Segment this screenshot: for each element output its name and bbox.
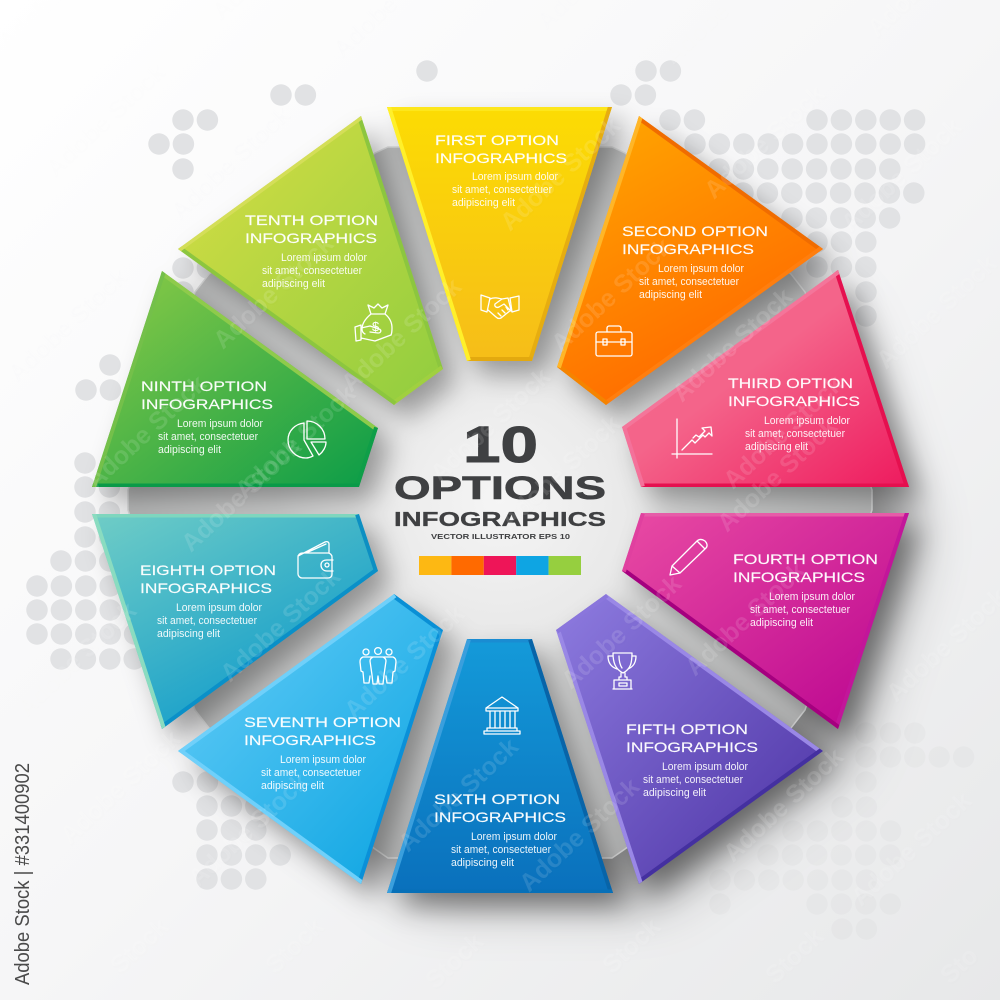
body text bbox=[157, 602, 262, 640]
stock watermarks: Adobe Stock bbox=[514, 773, 645, 897]
stock watermarks: Adobe Stock bbox=[680, 557, 811, 681]
subtitle: VECTOR ILLUSTRATOR EPS 10 bbox=[431, 532, 570, 541]
panel shadows bbox=[105, 121, 922, 907]
heading: FIRST OPTION bbox=[435, 132, 559, 148]
stock watermarks: Adobe Stock bbox=[176, 433, 307, 557]
stock watermarks: Adobe Stock bbox=[81, 370, 212, 494]
body text: Lorem ipsum dolor bbox=[281, 252, 367, 264]
body text: adipiscing elit bbox=[452, 197, 515, 209]
body text bbox=[452, 171, 558, 209]
stock watermarks: Stock bbox=[105, 912, 174, 979]
segment shape bbox=[92, 514, 378, 729]
icon: pen bbox=[670, 540, 707, 575]
stock watermarks: Adobe Stock bbox=[39, 57, 170, 181]
body text: adipiscing elit bbox=[262, 278, 325, 290]
stock watermarks: Adobe Stock bbox=[712, 413, 843, 537]
body text: Lorem ipsum dolor bbox=[471, 831, 557, 843]
body text bbox=[261, 754, 366, 792]
title: infographics: INFOGRAPHICS bbox=[394, 509, 606, 531]
heading: FIFTH OPTION bbox=[626, 721, 748, 737]
segment shape bbox=[92, 271, 378, 487]
stock watermarks: Adobe Stock bbox=[836, 113, 967, 237]
icon: wallet bbox=[298, 542, 333, 578]
colour swatch bar bbox=[419, 556, 581, 575]
segment shape bbox=[178, 116, 443, 405]
panel: sixth option bbox=[387, 639, 613, 893]
body text: adipiscing elit bbox=[639, 289, 702, 301]
heading: INFOGRAPHICS bbox=[733, 569, 865, 585]
icon: briefcase bbox=[596, 326, 632, 356]
segment shape bbox=[178, 594, 443, 884]
heading: INFOGRAPHICS bbox=[622, 241, 754, 257]
panel: second option bbox=[557, 116, 823, 405]
body text: sit amet, consectetuer bbox=[157, 615, 257, 627]
icon: people bbox=[360, 648, 396, 684]
body text bbox=[451, 831, 557, 869]
heading: NINTH OPTION bbox=[141, 378, 267, 394]
stock watermarks: Adobe Stock bbox=[718, 743, 849, 867]
body text: sit amet, consectetuer bbox=[261, 767, 361, 779]
body text: adipiscing elit bbox=[643, 787, 706, 799]
stock watermarks: Adobe Stock bbox=[215, 563, 346, 687]
title: options: OPTIONS bbox=[394, 470, 606, 506]
stock watermarks: Sto bbox=[935, 941, 984, 989]
background dot map bbox=[37, 71, 964, 929]
body text bbox=[158, 418, 263, 456]
icon: handshake bbox=[481, 295, 519, 318]
stock watermarks: Adobe Stock bbox=[871, 250, 1000, 374]
title: 10: 10 bbox=[463, 416, 538, 473]
stock watermarks: Stock bbox=[420, 927, 489, 994]
icon: bank bbox=[484, 697, 520, 734]
body text: Lorem ipsum dolor bbox=[769, 591, 855, 603]
heading bbox=[728, 375, 860, 409]
body text: adipiscing elit bbox=[157, 628, 220, 640]
stock watermarks: Adobe Stock bbox=[336, 273, 467, 397]
stock watermarks: Stock bbox=[597, 912, 666, 979]
body text: sit amet, consectetuer bbox=[750, 604, 850, 616]
heading bbox=[435, 132, 567, 166]
body text bbox=[639, 263, 744, 301]
heading: SECOND OPTION bbox=[622, 223, 768, 239]
stock watermarks: Adobe Stock bbox=[183, 768, 314, 892]
stock watermarks: Adobe Stock bbox=[11, 597, 142, 721]
segment shape bbox=[387, 639, 613, 893]
stock watermarks: Adobe Stock bbox=[164, 100, 295, 224]
body text bbox=[643, 761, 748, 799]
body text: Lorem ipsum dolor bbox=[658, 263, 744, 275]
heading: SIXTH OPTION bbox=[434, 791, 560, 807]
body text: Lorem ipsum dolor bbox=[280, 754, 366, 766]
icon: pie chart bbox=[288, 421, 326, 458]
heading bbox=[244, 714, 401, 748]
heading: INFOGRAPHICS bbox=[244, 732, 376, 748]
body text bbox=[750, 591, 855, 629]
heading: INFOGRAPHICS bbox=[728, 393, 860, 409]
panel: fourth option bbox=[622, 513, 909, 729]
body text: sit amet, consectetuer bbox=[262, 265, 362, 277]
body text: adipiscing elit bbox=[745, 441, 808, 453]
panel: tenth option bbox=[178, 116, 443, 405]
body text: sit amet, consectetuer bbox=[643, 774, 743, 786]
stock watermarks: Adobe Stock bbox=[718, 370, 849, 494]
segment shape bbox=[622, 270, 909, 487]
heading: INFOGRAPHICS bbox=[626, 739, 758, 755]
body text: adipiscing elit bbox=[451, 857, 514, 869]
stock watermarks: Adobe Stock bbox=[556, 570, 687, 694]
stock watermarks: Adobe Stock bbox=[1, 262, 132, 386]
heading: FOURTH OPTION bbox=[733, 551, 878, 567]
stock watermarks: Adobe Stock bbox=[546, 233, 677, 357]
body text bbox=[262, 252, 367, 290]
body text: sit amet, consectetuer bbox=[452, 184, 552, 196]
body text bbox=[745, 415, 850, 453]
heading: TENTH OPTION bbox=[245, 212, 378, 228]
stock watermarks: Adobe Stock bbox=[230, 380, 361, 504]
heading: INFOGRAPHICS bbox=[141, 396, 273, 412]
stock id label: Adobe Stock | #331400902 bbox=[12, 763, 34, 985]
body text: Lorem ipsum dolor bbox=[764, 415, 850, 427]
body text: sit amet, consectetuer bbox=[639, 276, 739, 288]
heading bbox=[141, 378, 273, 412]
stock watermarks: Adobe Stock bbox=[339, 600, 470, 724]
body text: Lorem ipsum dolor bbox=[662, 761, 748, 773]
panel: ninth option bbox=[92, 271, 378, 487]
panel: third option bbox=[622, 270, 909, 487]
stock watermarks: Adobe Stock bbox=[667, 283, 798, 407]
stock watermarks: Adobe Stock bbox=[208, 230, 339, 354]
panel: eighth option bbox=[92, 514, 378, 729]
stock watermarks: Adobe Stock bbox=[425, 363, 556, 487]
stock watermarks: Adobe Stock bbox=[495, 112, 626, 236]
stock watermarks: Adobe Stock bbox=[55, 725, 186, 849]
segment shape bbox=[387, 107, 612, 361]
heading: INFOGRAPHICS bbox=[435, 150, 567, 166]
body text: adipiscing elit bbox=[158, 444, 221, 456]
large cast shadow bbox=[172, 187, 912, 898]
body text: Lorem ipsum dolor bbox=[176, 602, 262, 614]
icon: money bag in hand bbox=[355, 304, 392, 341]
heading: INFOGRAPHICS bbox=[140, 580, 272, 596]
panel: seventh option bbox=[178, 594, 443, 884]
heading: INFOGRAPHICS bbox=[245, 230, 377, 246]
stock watermarks: Adobe Stock bbox=[846, 787, 977, 911]
icon: growth chart bbox=[672, 419, 712, 458]
segment shape bbox=[622, 513, 909, 729]
panel: fifth option bbox=[556, 594, 823, 884]
stock watermarks: Adobe Stock bbox=[699, 80, 830, 204]
body text: sit amet, consectetuer bbox=[745, 428, 845, 440]
body text: sit amet, consectetuer bbox=[451, 844, 551, 856]
heading: THIRD OPTION bbox=[728, 375, 853, 391]
icon: money bag in hand: $ bbox=[372, 319, 380, 334]
heading: EIGHTH OPTION bbox=[140, 562, 276, 578]
segment shape bbox=[557, 116, 823, 405]
heading bbox=[434, 791, 566, 825]
title block bbox=[394, 416, 606, 541]
stock watermarks: Stock bbox=[760, 922, 829, 989]
heading: SEVENTH OPTION bbox=[244, 714, 401, 730]
body text: sit amet, consectetuer bbox=[158, 431, 258, 443]
heading bbox=[140, 562, 276, 596]
heading bbox=[245, 212, 378, 246]
heading bbox=[733, 551, 878, 585]
stock watermarks: Adobe Stock bbox=[393, 733, 524, 857]
stock watermarks: Adobe Stock bbox=[495, 410, 626, 534]
heading bbox=[626, 721, 758, 755]
body text: Lorem ipsum dolor bbox=[177, 418, 263, 430]
icon: trophy bbox=[608, 653, 636, 689]
segment shape bbox=[556, 594, 823, 884]
heading bbox=[622, 223, 768, 257]
central grey plate bbox=[128, 147, 872, 858]
stock watermarks: Stock bbox=[260, 912, 329, 979]
body text: adipiscing elit bbox=[750, 617, 813, 629]
body text: adipiscing elit bbox=[261, 780, 324, 792]
body text: Lorem ipsum dolor bbox=[472, 171, 558, 183]
panel: first option bbox=[387, 107, 612, 361]
heading: INFOGRAPHICS bbox=[434, 809, 566, 825]
